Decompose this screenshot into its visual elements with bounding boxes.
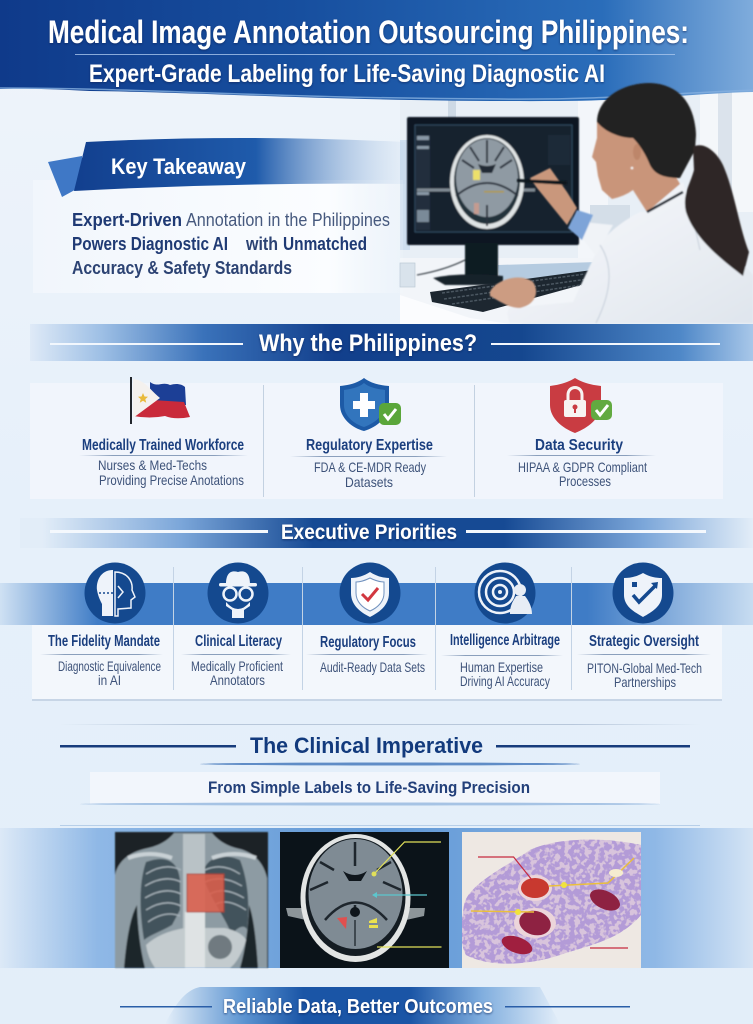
heading: Clinical Literacy	[195, 633, 282, 650]
description: PITON-Global Med-Tech	[587, 660, 702, 676]
description: Annotators	[210, 672, 265, 688]
heading: Regulatory Focus	[320, 634, 416, 651]
item: strategic oversight	[577, 562, 711, 690]
takeaway text: Annotation in the Philippines	[186, 210, 390, 230]
heading: The Fidelity Mandate	[48, 633, 160, 650]
heading: Data Security	[535, 437, 623, 454]
section banner: why the philippines: Why the Philippines?	[259, 330, 477, 357]
icon: shield with check	[340, 562, 400, 624]
item: regulatory focus	[306, 562, 428, 675]
description: Human Expertise	[460, 659, 543, 675]
section banner: executive priorities: Executive Priorities	[281, 521, 457, 544]
description: Driving AI Accuracy	[460, 673, 550, 689]
description: Processes	[559, 473, 611, 489]
glass	[400, 263, 415, 287]
keyboard	[430, 270, 592, 312]
hero photo: radiologist annotating brain scan	[400, 83, 753, 323]
ribbon: Key Takeaway	[111, 154, 247, 179]
description: Medically Proficient	[191, 658, 283, 674]
takeaway text: with	[245, 234, 278, 254]
card: data security	[507, 378, 656, 489]
item: the fidelity mandate	[40, 562, 163, 688]
description: Nurses & Med-Techs	[98, 457, 207, 473]
description: HIPAA & GDPR Compliant	[518, 459, 647, 475]
description	[314, 459, 426, 490]
description	[587, 660, 702, 690]
description: in AI	[98, 672, 121, 688]
heading: Medically Trained Workforce	[82, 437, 244, 454]
takeaway card	[33, 180, 403, 293]
item: clinical literacy	[181, 562, 291, 688]
subheading: From Simple Labels to Life-Saving Precision	[208, 778, 530, 797]
description	[460, 659, 550, 689]
description: Audit-Ready Data Sets	[320, 659, 425, 675]
icon: blue shield	[340, 378, 401, 431]
description: Datasets	[345, 474, 393, 490]
heading: Regulatory Expertise	[306, 437, 433, 454]
heading: Strategic Oversight	[589, 633, 699, 650]
takeaway text: Accuracy & Safety Standards	[72, 258, 292, 278]
image: histology slide	[462, 832, 641, 968]
description	[191, 658, 283, 688]
description	[58, 658, 161, 688]
image strip	[0, 825, 753, 968]
description: Providing Precise Anotations	[99, 472, 244, 488]
image: brain MRI	[280, 832, 449, 968]
section banner: why the philippines	[30, 324, 753, 361]
header banner	[0, 0, 753, 101]
monitor with brain scan	[407, 117, 579, 285]
ribbon	[48, 138, 405, 197]
takeaway text: Powers Diagnostic AI	[72, 234, 228, 254]
panel: executive priorities	[0, 562, 753, 701]
subtitle: Expert-Grade Labeling for Life-Saving Diagnostic AI	[89, 60, 605, 88]
description: Diagnostic Equivalence	[58, 658, 161, 674]
heading: The Clinical Imperative	[250, 733, 483, 758]
description: FDA & CE-MDR Ready	[314, 459, 426, 475]
image: chest x-ray	[115, 832, 268, 968]
hero backdrop: clinic window	[400, 88, 753, 324]
icon: shield with rising arrow	[612, 562, 674, 624]
panel: why the philippines cards	[30, 377, 723, 499]
takeaway text: Expert-Driven	[72, 210, 182, 230]
takeaway text: Unmatched	[283, 234, 367, 254]
description	[518, 459, 647, 489]
item: intelligence arbitrage	[441, 562, 563, 689]
section: the clinical imperative	[60, 724, 700, 806]
icon: philippine flag	[130, 377, 190, 424]
card: medically trained workforce	[79, 377, 248, 488]
panel: key takeaway	[33, 138, 405, 293]
footer banner	[120, 987, 630, 1024]
doctor	[490, 83, 753, 323]
heading: Intelligence Arbitrage	[450, 632, 560, 649]
footer text: Reliable Data, Better Outcomes	[223, 996, 493, 1018]
description: Partnerships	[614, 674, 676, 690]
icon: target and person	[474, 562, 536, 624]
card: regulatory expertise	[290, 378, 447, 490]
section banner: executive priorities	[20, 518, 753, 548]
icon: red shield with lock	[550, 378, 612, 433]
description	[98, 457, 244, 488]
icon: head profile	[84, 562, 146, 624]
icon: doctor in hat and glasses	[208, 562, 268, 624]
